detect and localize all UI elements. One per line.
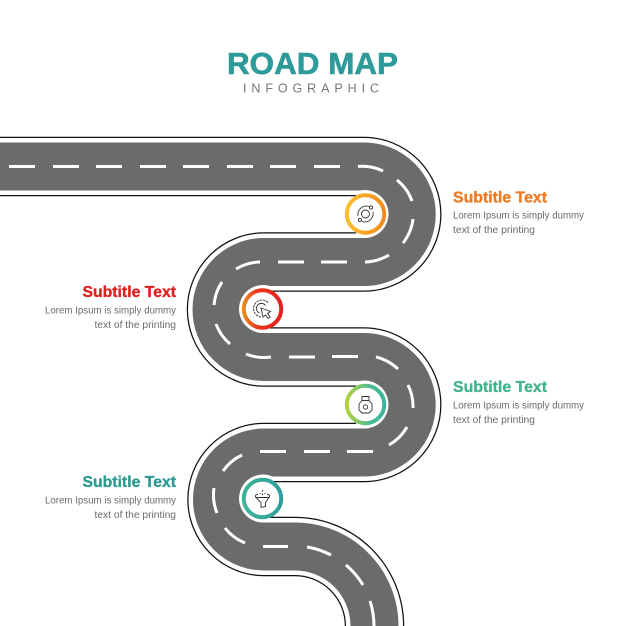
step 2 text: Lorem Ipsum is simply dummy	[45, 306, 177, 316]
icon: funnel	[255, 490, 270, 508]
step 3 text: Subtitle Text	[453, 379, 547, 396]
step 1 text: Lorem Ipsum is simply dummy	[453, 210, 585, 222]
step 3 text	[453, 379, 585, 426]
step 4 text: Lorem Ipsum is simply dummy	[45, 496, 177, 506]
road centre dashes	[9, 166, 413, 626]
marker 4: teal	[239, 474, 287, 522]
step 3 text: Lorem Ipsum is simply dummy	[453, 400, 585, 412]
title: ROAD MAP	[227, 46, 398, 81]
step 2 text: text of the printing	[94, 320, 176, 331]
step 3 text: text of the printing	[453, 415, 535, 426]
step 4 text	[45, 474, 177, 521]
marker 3: green	[340, 380, 388, 428]
winding road	[0, 166, 413, 626]
step 4 text: text of the printing	[94, 510, 176, 521]
step 2 text: Subtitle Text	[82, 284, 176, 301]
step 4 text: Subtitle Text	[82, 474, 176, 491]
marker 2: red	[239, 285, 287, 333]
step 1 text: Subtitle Text	[453, 190, 547, 206]
icon: locked weight	[359, 396, 372, 413]
icon: target cursor	[254, 300, 270, 318]
step 1 text: text of the printing	[453, 225, 535, 236]
marker 1: orange	[340, 190, 388, 238]
icon: orbit	[358, 206, 373, 222]
step 2 text	[45, 284, 177, 331]
subtitle: infographic: INFOGRAPHIC	[243, 82, 379, 96]
step 1 text	[453, 190, 585, 236]
